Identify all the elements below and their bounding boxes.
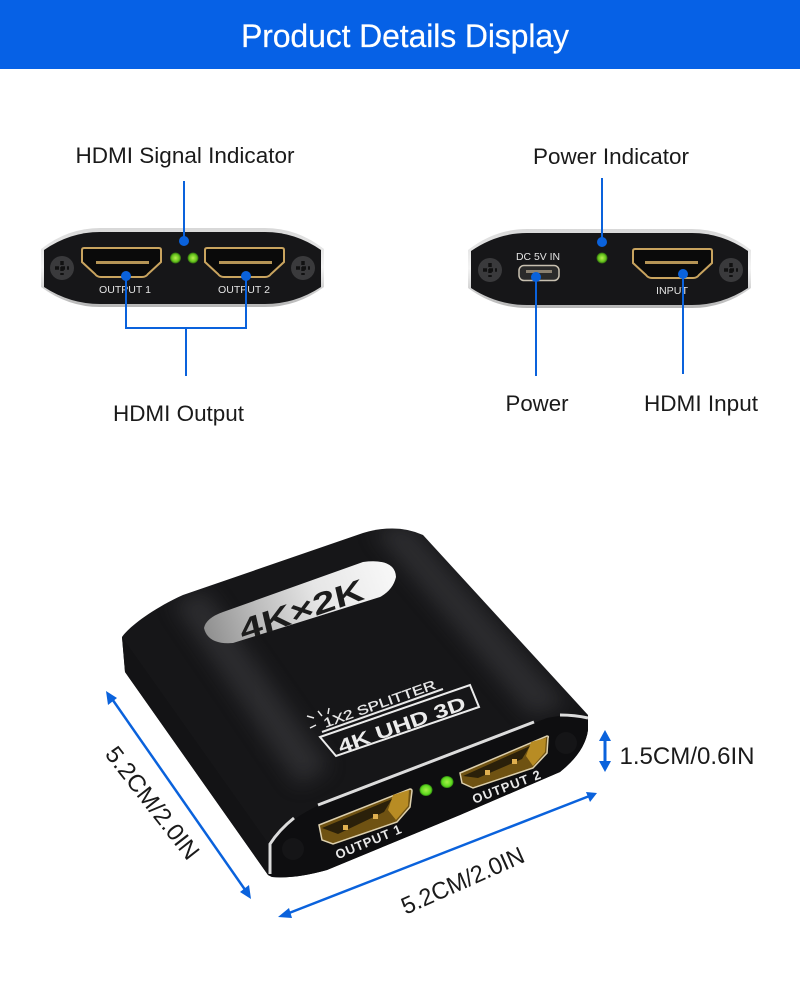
port label: OUTPUT 2: OUTPUT 2 <box>470 767 543 807</box>
port label: OUTPUT 1: OUTPUT 1 <box>333 822 403 862</box>
icon: right screw <box>291 256 315 280</box>
port: HDMI input <box>633 249 712 278</box>
icon: right screw <box>719 258 743 282</box>
dimension label: depth: 5.2CM/2.0IN <box>99 741 204 865</box>
panel: output side of splitter <box>41 228 324 307</box>
device body <box>122 528 588 877</box>
print: 4K UHD 3D box <box>320 685 479 758</box>
label: Power Indicator: Power Indicator <box>533 144 689 169</box>
dimension label: height: 1.5CM/0.6IN <box>620 743 754 770</box>
label: HDMI Input: HDMI Input <box>644 391 758 416</box>
callout line: power indicator <box>597 178 607 247</box>
icon: left screw <box>50 256 74 280</box>
side edge shading <box>122 637 268 875</box>
port 2 <box>460 736 548 788</box>
callout line: power <box>531 272 541 376</box>
dimension arrow: depth <box>106 691 251 899</box>
label: HDMI Signal Indicator: HDMI Signal Indicator <box>76 143 294 168</box>
dimension arrow: width <box>278 792 597 918</box>
power light <box>596 252 608 264</box>
surface highlights <box>172 522 568 786</box>
label: HDMI Output: HDMI Output <box>113 401 244 426</box>
right front screw <box>555 732 577 754</box>
callout line: HDMI input <box>678 269 688 374</box>
print: 1X2 SPLITTER: 1X2 SPLITTER <box>321 677 438 731</box>
port label: OUTPUT 1: OUTPUT 1 <box>99 285 151 296</box>
port label: DC 5V IN: DC 5V IN <box>516 251 560 263</box>
title: Product Details Display <box>241 18 569 54</box>
4K×2K badge <box>204 561 396 643</box>
badge text: 4K×2K <box>237 573 367 648</box>
port: output 1 <box>82 248 161 277</box>
silver rim <box>270 715 588 874</box>
port label: INPUT: INPUT <box>656 285 689 297</box>
port: micro USB <box>519 266 559 280</box>
green lights <box>420 776 454 796</box>
left front screw <box>282 838 304 860</box>
port label: OUTPUT 2: OUTPUT 2 <box>218 285 270 296</box>
icon: left screw <box>478 258 502 282</box>
print: divider <box>322 689 443 732</box>
front face <box>268 715 588 877</box>
indicator lights <box>170 252 198 264</box>
product photo: splitter in perspective <box>122 522 588 877</box>
label: Power: Power <box>506 391 568 416</box>
print: burst rays <box>307 708 329 728</box>
callout line: HDMI signal indicator <box>179 181 189 246</box>
callout bracket: HDMI output <box>121 271 251 376</box>
dimension label: width: 5.2CM/2.0IN <box>397 842 529 920</box>
panel: input side of splitter <box>468 229 751 308</box>
port: output 2 <box>205 248 284 277</box>
port 1 <box>319 789 412 844</box>
print: 4K UHD 3D box: 4K UHD 3D <box>336 694 469 758</box>
dimension arrow: height <box>599 730 611 772</box>
header banner <box>0 0 800 69</box>
